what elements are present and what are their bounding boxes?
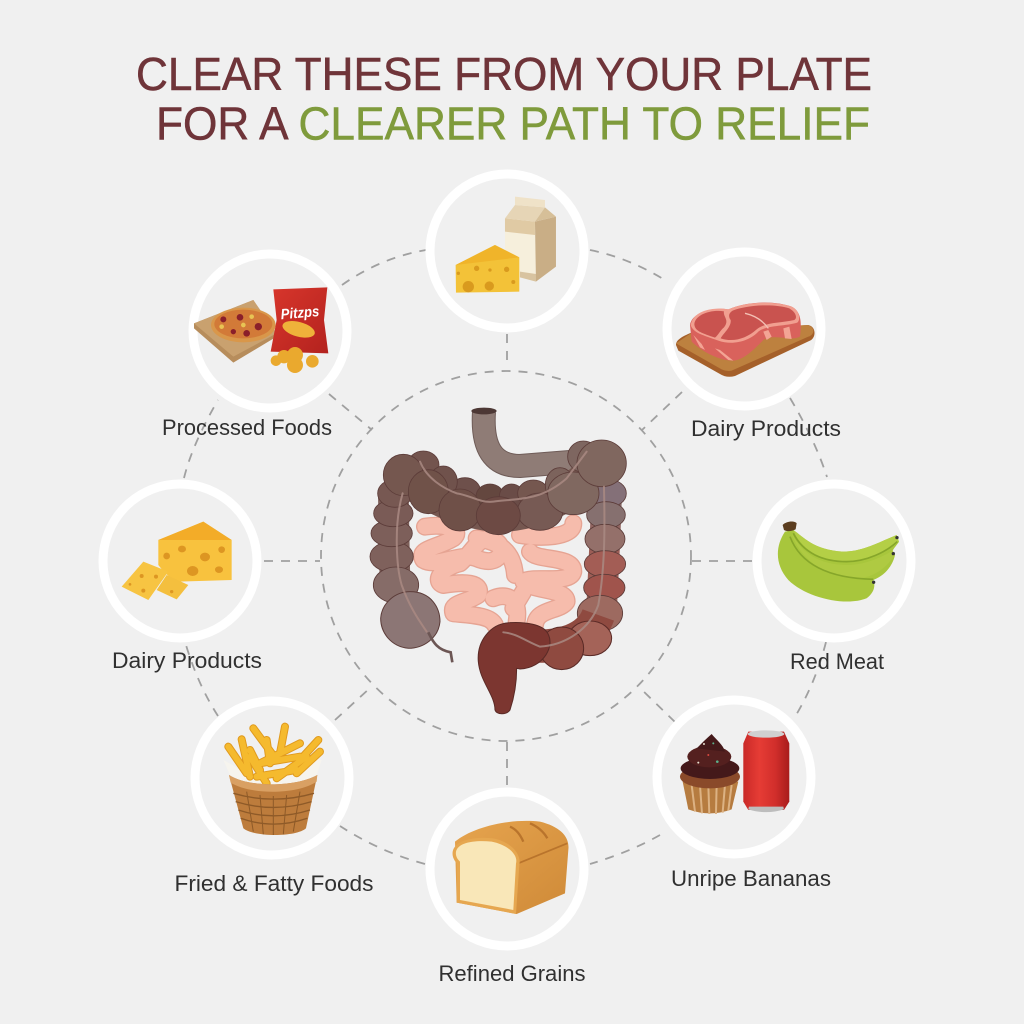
- title: FOR A CLEARER PATH TO RELIEF: [156, 98, 870, 150]
- icon: cupcake: [680, 734, 740, 814]
- label: Red Meat: [790, 649, 884, 674]
- icon: bread loaf: [453, 821, 568, 914]
- taenia bands: [397, 452, 604, 647]
- food circle: red meat steak: [667, 252, 821, 406]
- icon: soda can: [743, 730, 789, 812]
- label: Fried & Fatty Foods: [174, 871, 374, 896]
- food circle: processed foods: [193, 254, 347, 408]
- oesophagus / terminal tube: [471, 408, 573, 466]
- centre dashed circle: [321, 371, 691, 741]
- title: CLEAR THESE FROM YOUR PLATE: [136, 48, 872, 100]
- icon: steak: [690, 302, 801, 361]
- icon: fries in basket: [223, 727, 322, 835]
- food circle: cheese: [103, 484, 257, 638]
- icon: milk carton: [505, 197, 556, 282]
- icon: unripe bananas: [778, 521, 899, 602]
- icon: chips bag: Pitzps: [280, 304, 320, 323]
- label: Unripe Bananas: [671, 866, 831, 891]
- icon: wooden board: [676, 325, 815, 377]
- icon: cheese wedge: [456, 245, 519, 293]
- digestive system illustration: [370, 408, 626, 714]
- food circle: dairy top: [430, 174, 584, 328]
- food circle: cupcake and soda: [657, 700, 811, 854]
- label: Processed Foods: [162, 415, 332, 440]
- food circle: fries: [195, 701, 349, 855]
- sigmoid colon and rectum: [478, 615, 612, 714]
- small intestine: [422, 523, 573, 625]
- colon base mass: [393, 463, 607, 608]
- transverse colon: [383, 440, 626, 535]
- title: [136, 48, 872, 150]
- descending colon: [577, 479, 626, 631]
- food circle: bread: [430, 792, 584, 946]
- label: Dairy Products: [691, 416, 841, 441]
- food circle: bananas: [757, 484, 911, 638]
- icon: pizza box: [194, 300, 277, 363]
- label: Refined Grains: [438, 961, 586, 986]
- label: Dairy Products: [112, 648, 262, 673]
- outer dashed connector ring: [184, 250, 827, 864]
- icon: cheese block and slices: [122, 522, 232, 600]
- ascending colon: [370, 479, 452, 662]
